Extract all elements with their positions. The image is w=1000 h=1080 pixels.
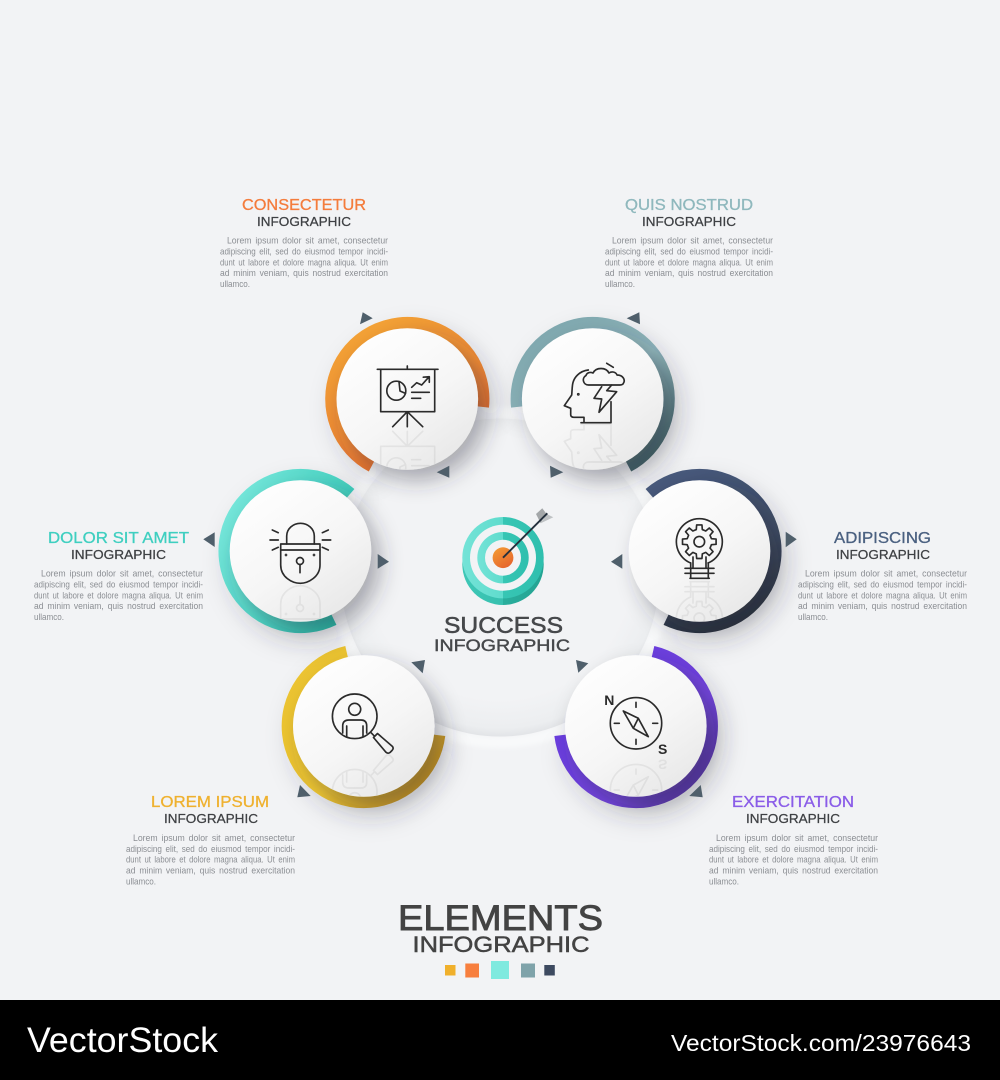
label: dolor sit amet: dunt ut labore et dolore magna aliqua. Ut enim [34,590,203,600]
label: exercitation: ullamco. [709,876,739,886]
panel: yellow circle [287,652,440,814]
label: consectetur: dunt ut labore et dolore magna aliqua. Ut enim [220,257,388,267]
title: INFOGRAPHIC [412,932,590,957]
label: lorem ipsum: ad minim veniam, quis nostrud exercitation [126,866,295,876]
label: dolor sit amet: ad minim veniam, quis nostrud exercitation [34,601,203,611]
label: exercitation: ad minim veniam, quis nostrud exercitation [709,866,878,876]
panel: orange circle [331,323,484,492]
label: adipiscing [798,530,967,622]
center heading: SUCCESS [444,612,563,638]
label: dolor sit amet [34,530,203,622]
label: dolor sit amet: adipiscing elit, sed do eiusmod tempor incidi- [34,580,203,590]
label: lorem ipsum: ullamco. [126,876,156,886]
label: dolor sit amet: DOLOR SIT AMET [48,530,189,547]
footer band: VectorStock [27,1021,219,1060]
icon: head with storm cloud [564,363,624,423]
label: consectetur [220,197,388,289]
label: adipiscing: ad minim veniam, quis nostrud exercitation [798,601,967,611]
title [398,899,603,957]
label: exercitation: EXERCITATION [732,794,854,811]
icon: compass [604,692,667,757]
label: adipiscing: INFOGRAPHIC [836,547,930,562]
icon: light bulb with gear [676,519,722,578]
label: adipiscing: ADIPISCING [834,530,931,547]
label: lorem ipsum: adipiscing elit, sed do eiusmod tempor incidi- [126,844,295,854]
label: quis nostrud: Lorem ipsum dolor sit amet, consectetur [612,236,773,246]
label: quis nostrud [605,197,773,289]
label: exercitation: dunt ut labore et dolore magna aliqua. Ut enim [709,855,878,865]
legend squares [445,961,555,979]
label: lorem ipsum: INFOGRAPHIC [164,811,258,826]
label: consectetur: Lorem ipsum dolor sit amet, consectetur [227,236,388,246]
label: adipiscing: adipiscing elit, sed do eiusmod tempor incidi- [798,580,967,590]
footer band [0,1000,1000,1080]
label: consectetur: CONSECTETUR [242,197,366,214]
label: consectetur: ad minim veniam, quis nostrud exercitation [220,268,388,278]
icon: magnifier over person [332,694,393,753]
panel: grey-teal circle [516,323,669,484]
panel: dark navy circle [629,475,776,641]
icon: target with arrow [462,508,553,605]
label: exercitation: Lorem ipsum dolor sit amet, consectetur [716,833,878,843]
label: dolor sit amet: Lorem ipsum dolor sit amet, consectetur [41,569,203,579]
label: adipiscing: ullamco. [798,612,828,622]
label: consectetur: INFOGRAPHIC [257,214,351,229]
label: exercitation: INFOGRAPHIC [746,811,840,826]
title: ELEMENTS [398,899,603,938]
icon: padlock [270,523,331,583]
label: adipiscing: dunt ut labore et dolore magna aliqua. Ut enim [798,590,967,600]
label: consectetur: adipiscing elit, sed do eiusmod tempor incidi- [220,246,388,256]
center heading: INFOGRAPHIC [434,636,570,655]
icon: presentation board [377,366,438,427]
central embossed circle [335,412,665,742]
label: quis nostrud: ullamco. [605,279,635,289]
label: quis nostrud: INFOGRAPHIC [642,214,736,229]
label: exercitation [709,794,878,886]
label: consectetur: ullamco. [220,279,250,289]
label: adipiscing: Lorem ipsum dolor sit amet, consectetur [805,569,967,579]
panel: purple circle [560,652,712,821]
footer band: VectorStock.com/23976643 [671,1030,971,1056]
panel: teal circle [224,475,371,646]
label: quis nostrud: QUIS NOSTRUD [625,197,753,214]
center heading [434,612,570,655]
label: quis nostrud: adipiscing elit, sed do eiusmod tempor incidi- [605,246,773,256]
label: exercitation: adipiscing elit, sed do eiusmod tempor incidi- [709,844,878,854]
label: quis nostrud: ad minim veniam, quis nostrud exercitation [605,268,773,278]
label: lorem ipsum: dunt ut labore et dolore magna aliqua. Ut enim [126,855,295,865]
label: lorem ipsum [126,794,295,886]
label: lorem ipsum: Lorem ipsum dolor sit amet, consectetur [133,833,295,843]
label: lorem ipsum: LOREM IPSUM [151,794,269,811]
arrow markers [203,312,797,797]
icon: compass: N [604,692,614,708]
label: dolor sit amet: ullamco. [34,612,64,622]
label: dolor sit amet: INFOGRAPHIC [71,547,166,562]
icon: compass: S [658,741,667,757]
label: quis nostrud: dunt ut labore et dolore magna aliqua. Ut enim [605,257,773,267]
